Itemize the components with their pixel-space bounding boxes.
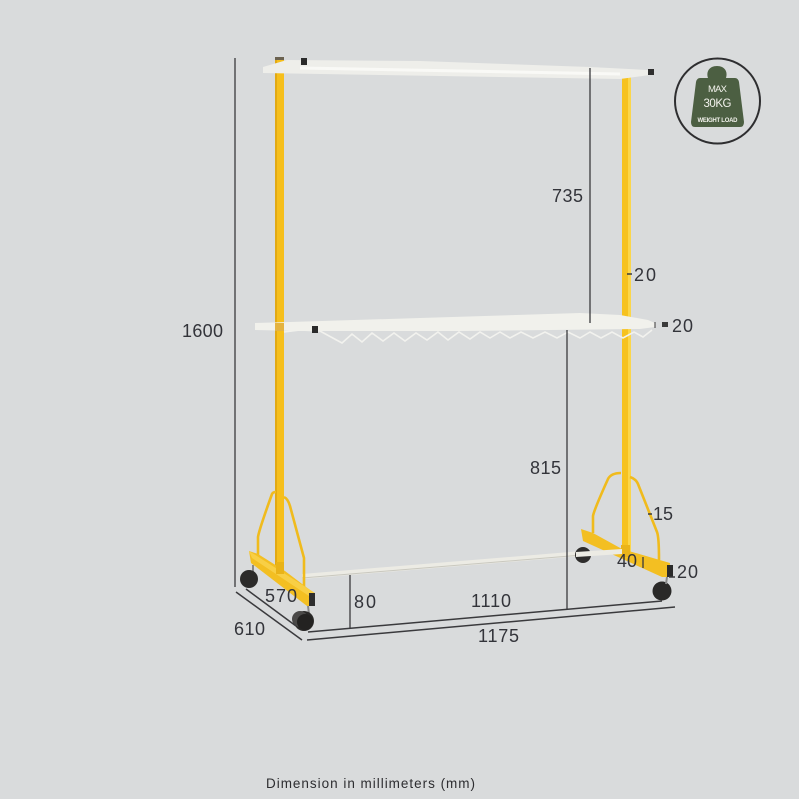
label 20 shelf: 20 — [672, 316, 693, 336]
lower rail — [302, 551, 582, 579]
label 40: 40 — [617, 551, 637, 571]
dimension lines — [235, 58, 675, 640]
weight load badge: 30KG — [704, 98, 732, 110]
right frame post — [622, 77, 631, 557]
label 610: 610 — [234, 619, 265, 639]
left frame post — [275, 57, 284, 576]
caption: Dimension in millimeters (mm) — [266, 776, 475, 791]
label 1110: 1110 — [471, 591, 511, 611]
label 20 base: 20 — [677, 562, 698, 582]
weight load badge: MAX — [708, 84, 728, 95]
label 15: 15 — [653, 504, 673, 524]
label 735: 735 — [552, 186, 583, 206]
label 570: 570 — [265, 586, 297, 606]
label 815: 815 — [530, 458, 561, 478]
weight load badge — [675, 58, 760, 144]
top shelf — [263, 58, 654, 79]
left base with brackets and casters — [240, 492, 315, 631]
label 80: 80 — [354, 592, 376, 612]
right base with brackets and casters — [550, 473, 673, 600]
weight load badge: WEIGHT LOAD — [698, 118, 738, 124]
label 20 upright: 20 — [634, 265, 656, 285]
middle shelf — [255, 313, 668, 343]
label 1175: 1175 — [478, 626, 519, 646]
label 1600: 1600 — [182, 321, 223, 341]
